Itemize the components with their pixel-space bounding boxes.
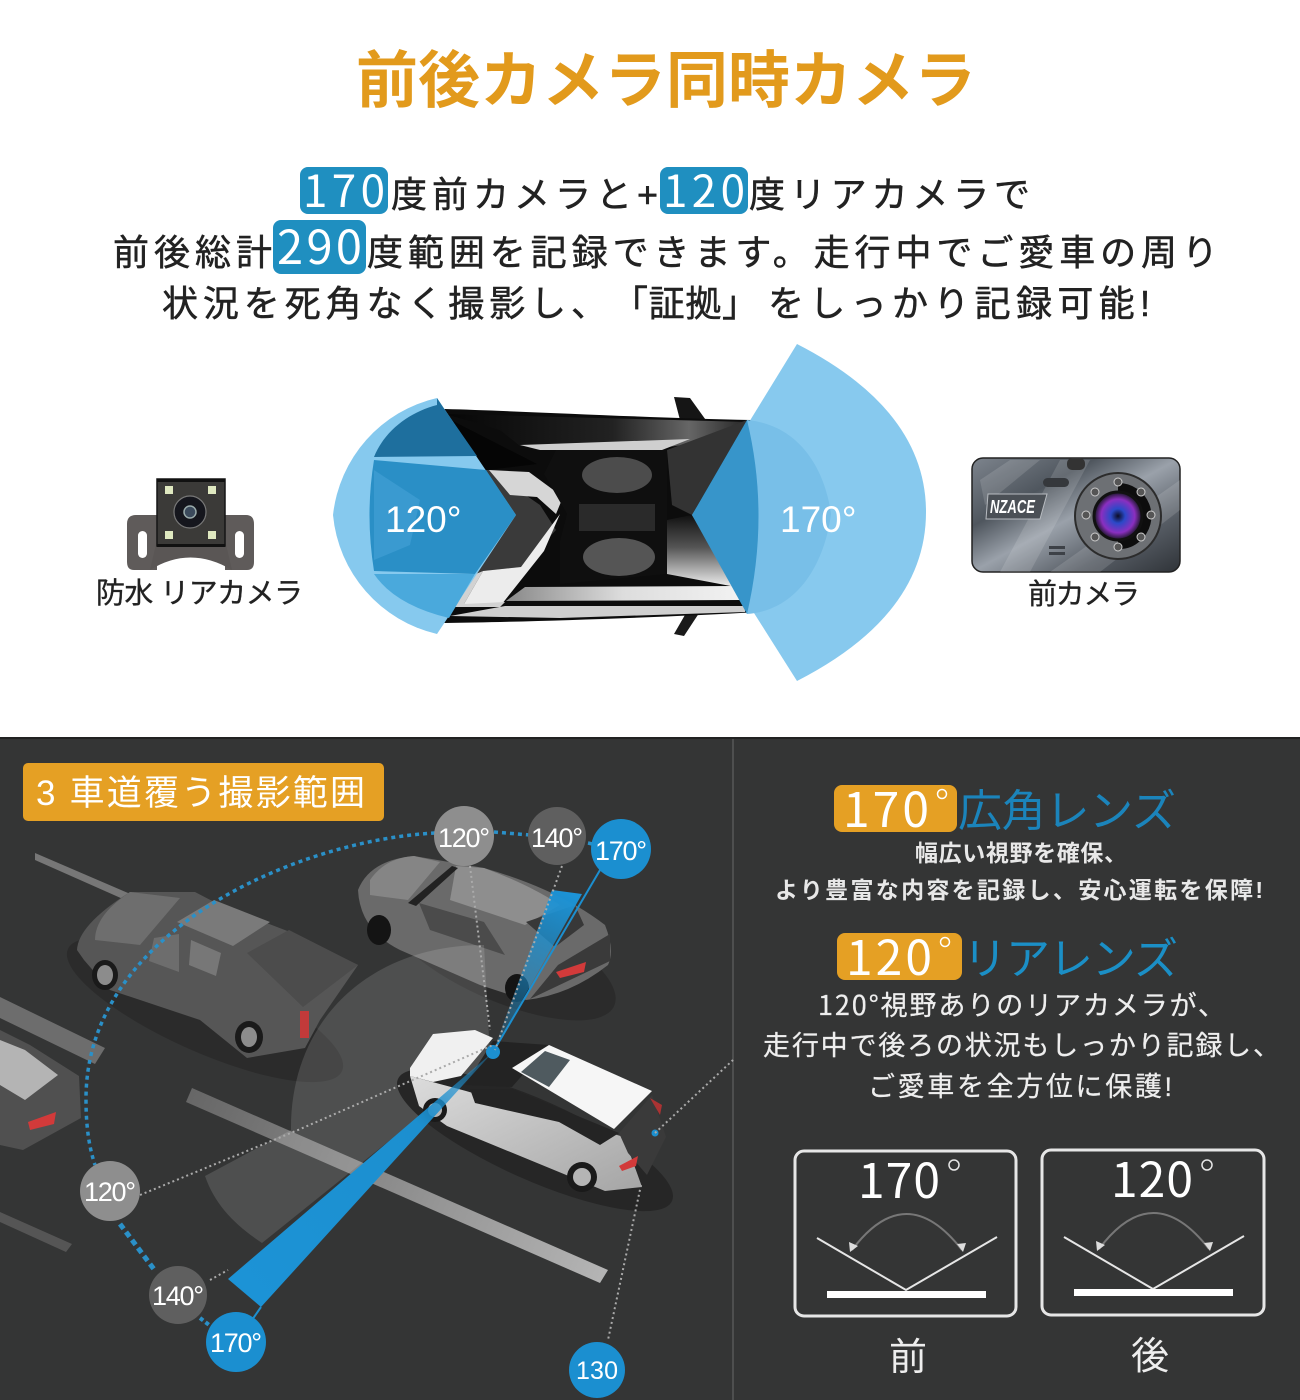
marker: left 170 degrees <box>206 1312 266 1372</box>
heading: 120 rear lens <box>837 919 1178 989</box>
dashed blue arc <box>86 832 597 1328</box>
car: pickup <box>51 892 359 1109</box>
badge: three-lane coverage: 3 車道覆う撮影範囲 <box>36 774 365 813</box>
background <box>0 0 1300 737</box>
icon: front dash camera <box>972 458 1180 572</box>
text: 170 description: より豊富な内容を記録し、安心運転を保障! <box>775 877 1263 903</box>
fan: front 170 degrees <box>692 344 926 681</box>
fan: rear 120 degrees <box>333 398 516 634</box>
marker: bottom 130 <box>569 1342 625 1398</box>
car: sedan <box>358 856 632 1047</box>
marker: top 170 degrees <box>591 819 651 879</box>
marker: left 120 degrees <box>80 1161 140 1221</box>
label: front camera: 前カメラ <box>1028 578 1140 611</box>
text: line 1a: 度前カメラと+ <box>391 174 658 215</box>
heading: 170 wide-angle lens <box>834 771 1176 841</box>
marker: left 120 degrees: 120° <box>84 1177 136 1207</box>
highlight: 290: 290 <box>277 209 362 278</box>
text: 170 description: 幅広い視野を確保、 <box>915 840 1127 866</box>
heading: 170 wide-angle lens: 広角レンズ <box>958 787 1176 836</box>
highlight: 170: 170 <box>303 156 385 220</box>
text block: intro paragraph <box>113 156 1218 324</box>
text: line 3: をしっかり記録可能! <box>768 283 1150 324</box>
panel: dark lower section <box>0 737 1300 1400</box>
marker: bottom 130: 130 <box>576 1357 618 1385</box>
marker: top 120 degrees: 120° <box>438 823 490 853</box>
sector: grey coverage area <box>205 945 490 1243</box>
diagram: rear 120 degrees: 120 <box>1111 1141 1193 1211</box>
text: line 2b: 度範囲を記録できます。走行中でご愛車の周り <box>367 232 1218 273</box>
car top view <box>437 397 760 636</box>
marker: top 140 degrees: 140° <box>531 823 583 853</box>
text: 120 description: 走行中で後ろの状況もしっかり記録し、 <box>763 1031 1280 1061</box>
heading: 170 wide-angle lens: 170 <box>843 771 929 841</box>
heading: 120 rear lens: 120 <box>846 919 932 989</box>
icon: rear camera <box>127 479 254 570</box>
text: line 3: 「証拠」 <box>612 283 758 324</box>
label: rear camera: 防水 リアカメラ <box>96 577 303 610</box>
chart: three-lane coverage diagram <box>0 806 733 1398</box>
car: white SUV <box>382 1030 688 1238</box>
car: left sedan <box>0 1030 81 1150</box>
badge: NZACE: NZACE <box>990 497 1036 517</box>
marker: top 120 degrees <box>434 806 494 866</box>
marker: top 140 degrees <box>528 807 586 865</box>
text: 120 description: 120°視野ありのリアカメラが、 <box>818 984 1225 1023</box>
marker: top 170 degrees: 170° <box>595 836 647 866</box>
label: 120 degrees: 120° <box>385 499 462 540</box>
road markings <box>0 853 608 1283</box>
marker: left 170 degrees: 170° <box>210 1328 262 1358</box>
diagram: front 170 degrees: 170 <box>858 1142 940 1212</box>
text: line 3 <box>162 283 1150 324</box>
title: 前後カメラ同時カメラ <box>356 47 976 116</box>
illustration: car with viewing angles <box>333 344 926 681</box>
text: 170 description <box>775 840 1263 903</box>
diagram: rear 120 degrees <box>1042 1141 1264 1315</box>
marker: left 140 degrees <box>149 1266 207 1324</box>
badge: three-lane coverage <box>23 763 384 821</box>
text: 120 description <box>763 984 1280 1102</box>
marker: left 140 degrees: 140° <box>152 1281 204 1311</box>
heading: 120 rear lens: リアレンズ <box>963 935 1178 984</box>
text: line 2a: 前後総計 <box>113 232 272 273</box>
label: rear: 後 <box>1131 1336 1169 1378</box>
text: 120 description: ご愛車を全方位に保護! <box>868 1072 1172 1102</box>
text: line 1b: 度リアカメラで <box>749 174 1030 215</box>
label: front: 前 <box>889 1337 927 1379</box>
text: line 3: 状況を死角なく撮影し、 <box>162 283 607 324</box>
highlight: 120: 120 <box>663 156 745 220</box>
label: 170 degrees: 170° <box>780 499 857 540</box>
dotted guide lines <box>140 866 733 1340</box>
diagram: front 170 degrees <box>795 1142 1016 1316</box>
fan: blue forward narrow beam <box>228 865 658 1320</box>
